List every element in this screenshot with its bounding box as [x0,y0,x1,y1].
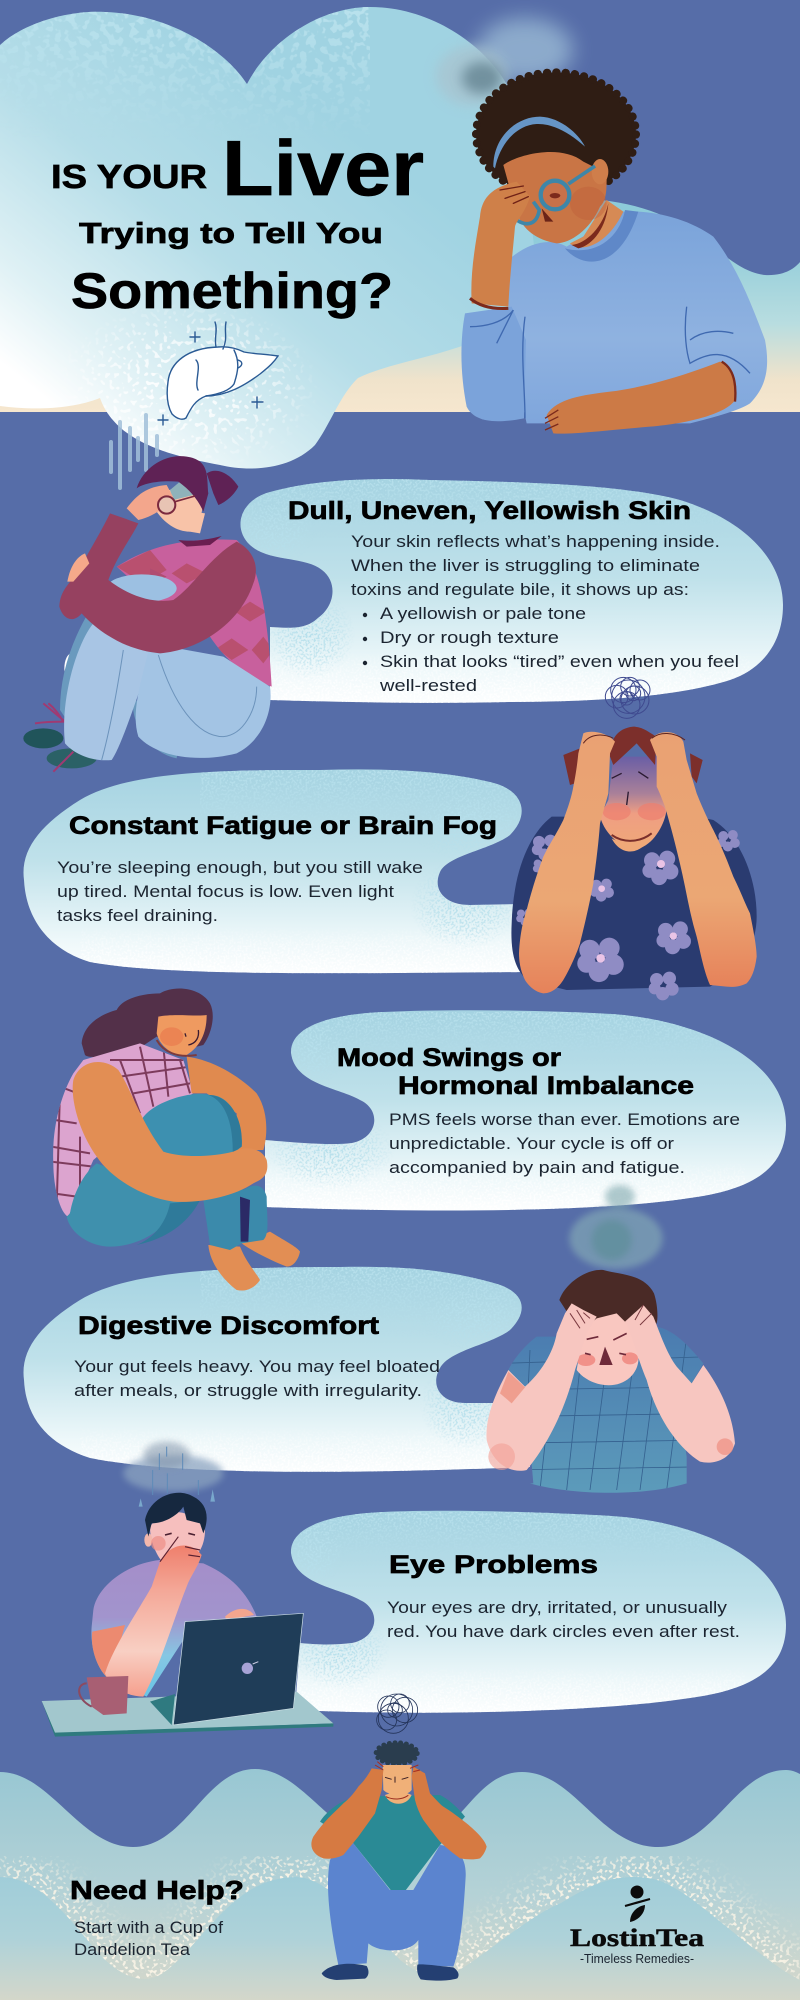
text: mood description [389,1110,740,1177]
heading: fatigue: Constant Fatigue or Brain Fog [69,812,497,840]
figure: person with flower shirt holding head [511,677,757,1000]
text: need help description: Dandelion Tea [74,1940,191,1959]
text: fatigue description: up tired. Mental focus is low. Even light [57,882,394,901]
figure: seated person holding head [311,1694,487,1981]
text: skin description: well-rested [379,676,477,695]
smoke [569,1185,663,1269]
heading: mood: Mood Swings or [337,1044,561,1072]
figure: woman hugging knees with plaid top [52,988,300,1291]
heading: eyes: Eye Problems [389,1551,598,1579]
logo: LostinTea: LostinTea [570,1925,705,1952]
title: Something? [71,263,393,319]
text: skin description: A yellowish or pale tone [380,604,586,623]
text: skin description: Dry or rough texture [380,628,559,647]
heading: mood: Hormonal Imbalance [398,1072,694,1100]
footer hills [0,1870,800,2000]
logo: LostinTea: -Timeless Remedies- [580,1951,694,1966]
text: eyes description: Your eyes are dry, irritated, or unusually [387,1598,728,1617]
text: skin description [351,532,739,695]
text: skin description: Skin that looks “tired” even when you feel [380,652,739,671]
footer panel [0,1769,800,2000]
bubble: skin [230,470,790,710]
text: mood description: unpredictable. Your cycle is off or [389,1134,674,1153]
icon: rain above woman [111,415,157,488]
heading: mood [337,1044,694,1100]
text: skin description: When the liver is struggling to eliminate [351,556,700,575]
panel: mood [260,1005,790,1215]
figure: person at laptop [42,1442,333,1737]
title: Liver [222,124,424,212]
text: eyes description: red. You have dark circles even after rest. [387,1622,740,1641]
heading: skin: Dull, Uneven, Yellowish Skin [288,497,691,525]
text: skin description: Your skin reflects what’s happening inside. [351,532,720,551]
header back wave [0,200,800,412]
title [51,124,424,319]
panel: skin [230,470,790,710]
figure: woman with glasses touching forehead [461,72,767,434]
text: skin description: toxins and regulate bile, it shows up as: [351,580,689,599]
footer wave [0,1769,800,2000]
text: digestive description [74,1357,440,1400]
text: eyes description [387,1598,740,1641]
text: digestive description: after meals, or struggle with irregularity. [74,1381,422,1400]
figure: woman with ponytail hugging knees [23,456,273,772]
heading: digestive: Digestive Discomfort [78,1312,380,1340]
header panel [0,0,800,480]
text: fatigue description [57,858,423,925]
figure: person holding head with smoke [486,1185,735,1493]
icon: scribble dark [377,1694,418,1733]
bubble: eyes [285,1505,790,1720]
text: mood description: accompanied by pain and fatigue. [389,1158,685,1177]
panel: eyes [285,1505,790,1720]
logo: LostinTea [570,1886,705,1966]
heading: need help: Need Help? [70,1875,244,1905]
icon: scribble [605,677,650,718]
text: mood description: PMS feels worse than ever. Emotions are [389,1110,740,1129]
header blob [0,0,560,480]
bubble: mood [260,1005,790,1215]
text: fatigue description: tasks feel draining. [57,906,218,925]
title: Trying to Tell You [79,218,383,250]
smoke above header figure [436,18,573,106]
icon: liver [158,322,278,425]
text: need help description: Start with a Cup of [74,1918,223,1937]
panel: digestive [24,1266,530,1472]
text: digestive description: Your gut feels heavy. You may feel bloated [74,1357,440,1376]
text: fatigue description: You’re sleeping enough, but you still wake [57,858,423,877]
storm cloud [123,1442,223,1507]
text: need help description [74,1918,223,1959]
title: IS YOUR [51,158,207,195]
sand stipple [0,1856,800,1980]
bubble: digestive [24,1266,530,1472]
panel: fatigue [24,769,522,974]
bubble: fatigue [24,769,522,974]
